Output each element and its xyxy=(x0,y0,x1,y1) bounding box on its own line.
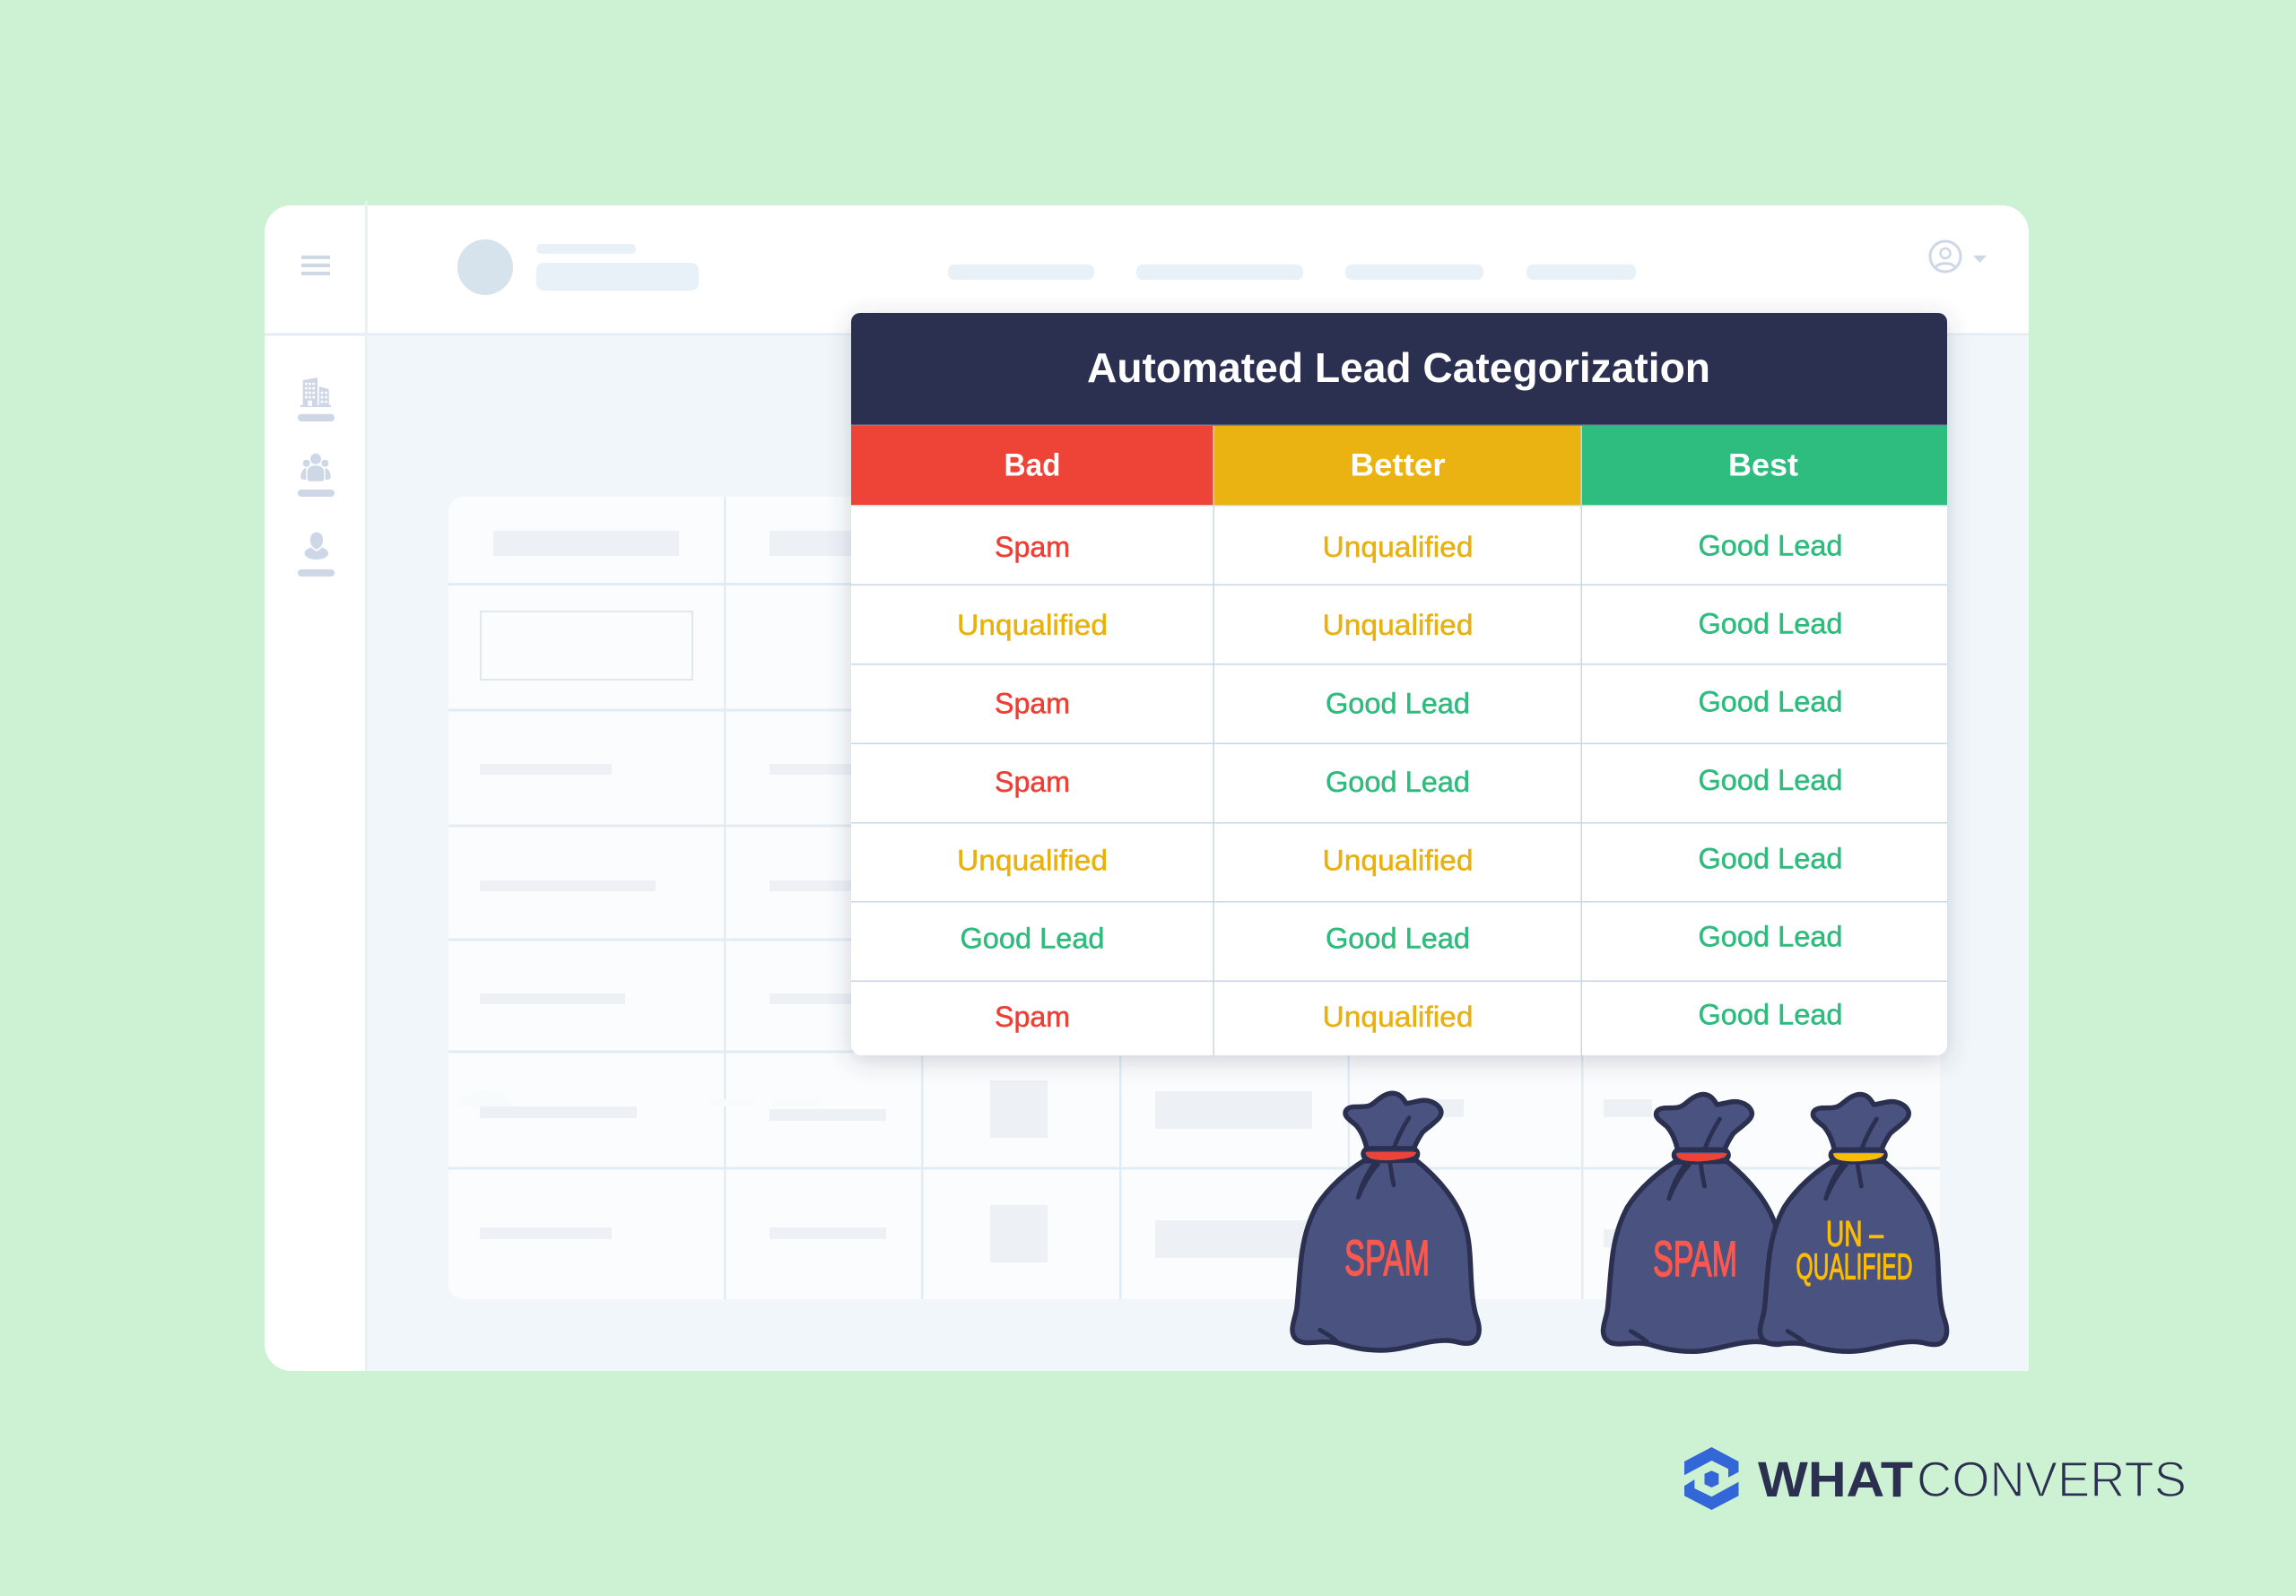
row placeholders xyxy=(480,764,1652,1262)
sidebar icon: team xyxy=(298,454,335,497)
logo wordmark: WHAT xyxy=(1758,1451,1913,1507)
column header: Better xyxy=(1213,426,1581,505)
avatar circle xyxy=(457,239,513,295)
row 7: Unqualified xyxy=(1322,1001,1473,1033)
icon: user account with caret xyxy=(1930,241,1987,272)
row 1: Good Lead xyxy=(1699,529,1842,561)
column header: Best xyxy=(1581,426,1947,505)
row 4: Spam xyxy=(995,766,1070,798)
icon: unqualified money bag: UN – xyxy=(1826,1214,1884,1253)
row 5: Unqualified xyxy=(957,845,1108,877)
row 7 xyxy=(995,999,1842,1033)
row 6 xyxy=(960,920,1842,954)
column header: Bad xyxy=(851,426,1213,505)
background data table xyxy=(448,497,1940,1299)
row 3: Spam xyxy=(995,687,1070,719)
sidebar icon: building xyxy=(298,377,335,421)
navigation placeholders xyxy=(948,265,1636,280)
row 1 xyxy=(995,529,1842,563)
row 1: Spam xyxy=(995,531,1070,563)
icon: spam money bag, right pair: SPAM xyxy=(1653,1230,1737,1287)
row 1: Unqualified xyxy=(1322,531,1473,563)
row 6: Good Lead xyxy=(960,922,1105,954)
row 5 xyxy=(957,843,1842,877)
icon: unqualified money bag xyxy=(1760,1095,1947,1351)
row 6: Good Lead xyxy=(1699,920,1842,952)
icon: spam money bag, right pair xyxy=(1604,1095,1790,1351)
panel: automated lead categorization table xyxy=(851,313,1947,1055)
row 4: Good Lead xyxy=(1699,764,1842,796)
row 4 xyxy=(995,764,1842,798)
row 2: Unqualified xyxy=(957,609,1108,641)
panel: dashboard mockup xyxy=(265,201,2029,1371)
row 5: Good Lead xyxy=(1699,843,1842,875)
row 7: Good Lead xyxy=(1699,999,1842,1031)
row 2 xyxy=(957,608,1842,641)
row 6: Good Lead xyxy=(1326,922,1470,954)
logo mark xyxy=(1684,1447,1738,1510)
column header: Best: Best xyxy=(1728,448,1798,482)
title bar xyxy=(851,313,1947,425)
table header placeholders xyxy=(493,531,859,556)
input placeholder xyxy=(481,612,692,680)
row 2: Good Lead xyxy=(1699,608,1842,640)
column header: Bad: Bad xyxy=(1004,448,1060,482)
title bar: Automated Lead Categorization xyxy=(1087,344,1710,391)
column header: Better: Better xyxy=(1351,448,1446,482)
faint ghost shapes xyxy=(459,1089,819,1106)
icon: spam money bag, left: SPAM xyxy=(1344,1229,1430,1286)
row 5: Unqualified xyxy=(1322,845,1473,877)
sidebar icon: person xyxy=(298,532,335,577)
logo: WhatConverts: CONVERTS xyxy=(1917,1451,2187,1507)
row 3: Good Lead xyxy=(1326,687,1470,719)
row 3: Good Lead xyxy=(1699,685,1842,717)
account name placeholders xyxy=(536,244,699,291)
logo: WhatConverts xyxy=(1684,1447,2187,1510)
icon: spam money bag, left xyxy=(1292,1093,1479,1350)
icon: hamburger menu xyxy=(301,256,330,275)
icon: unqualified money bag: QUALIFIED xyxy=(1796,1246,1912,1288)
row 2: Unqualified xyxy=(1322,609,1473,641)
row 3 xyxy=(995,685,1842,719)
row 7: Spam xyxy=(995,1001,1070,1033)
row 4: Good Lead xyxy=(1326,766,1470,798)
